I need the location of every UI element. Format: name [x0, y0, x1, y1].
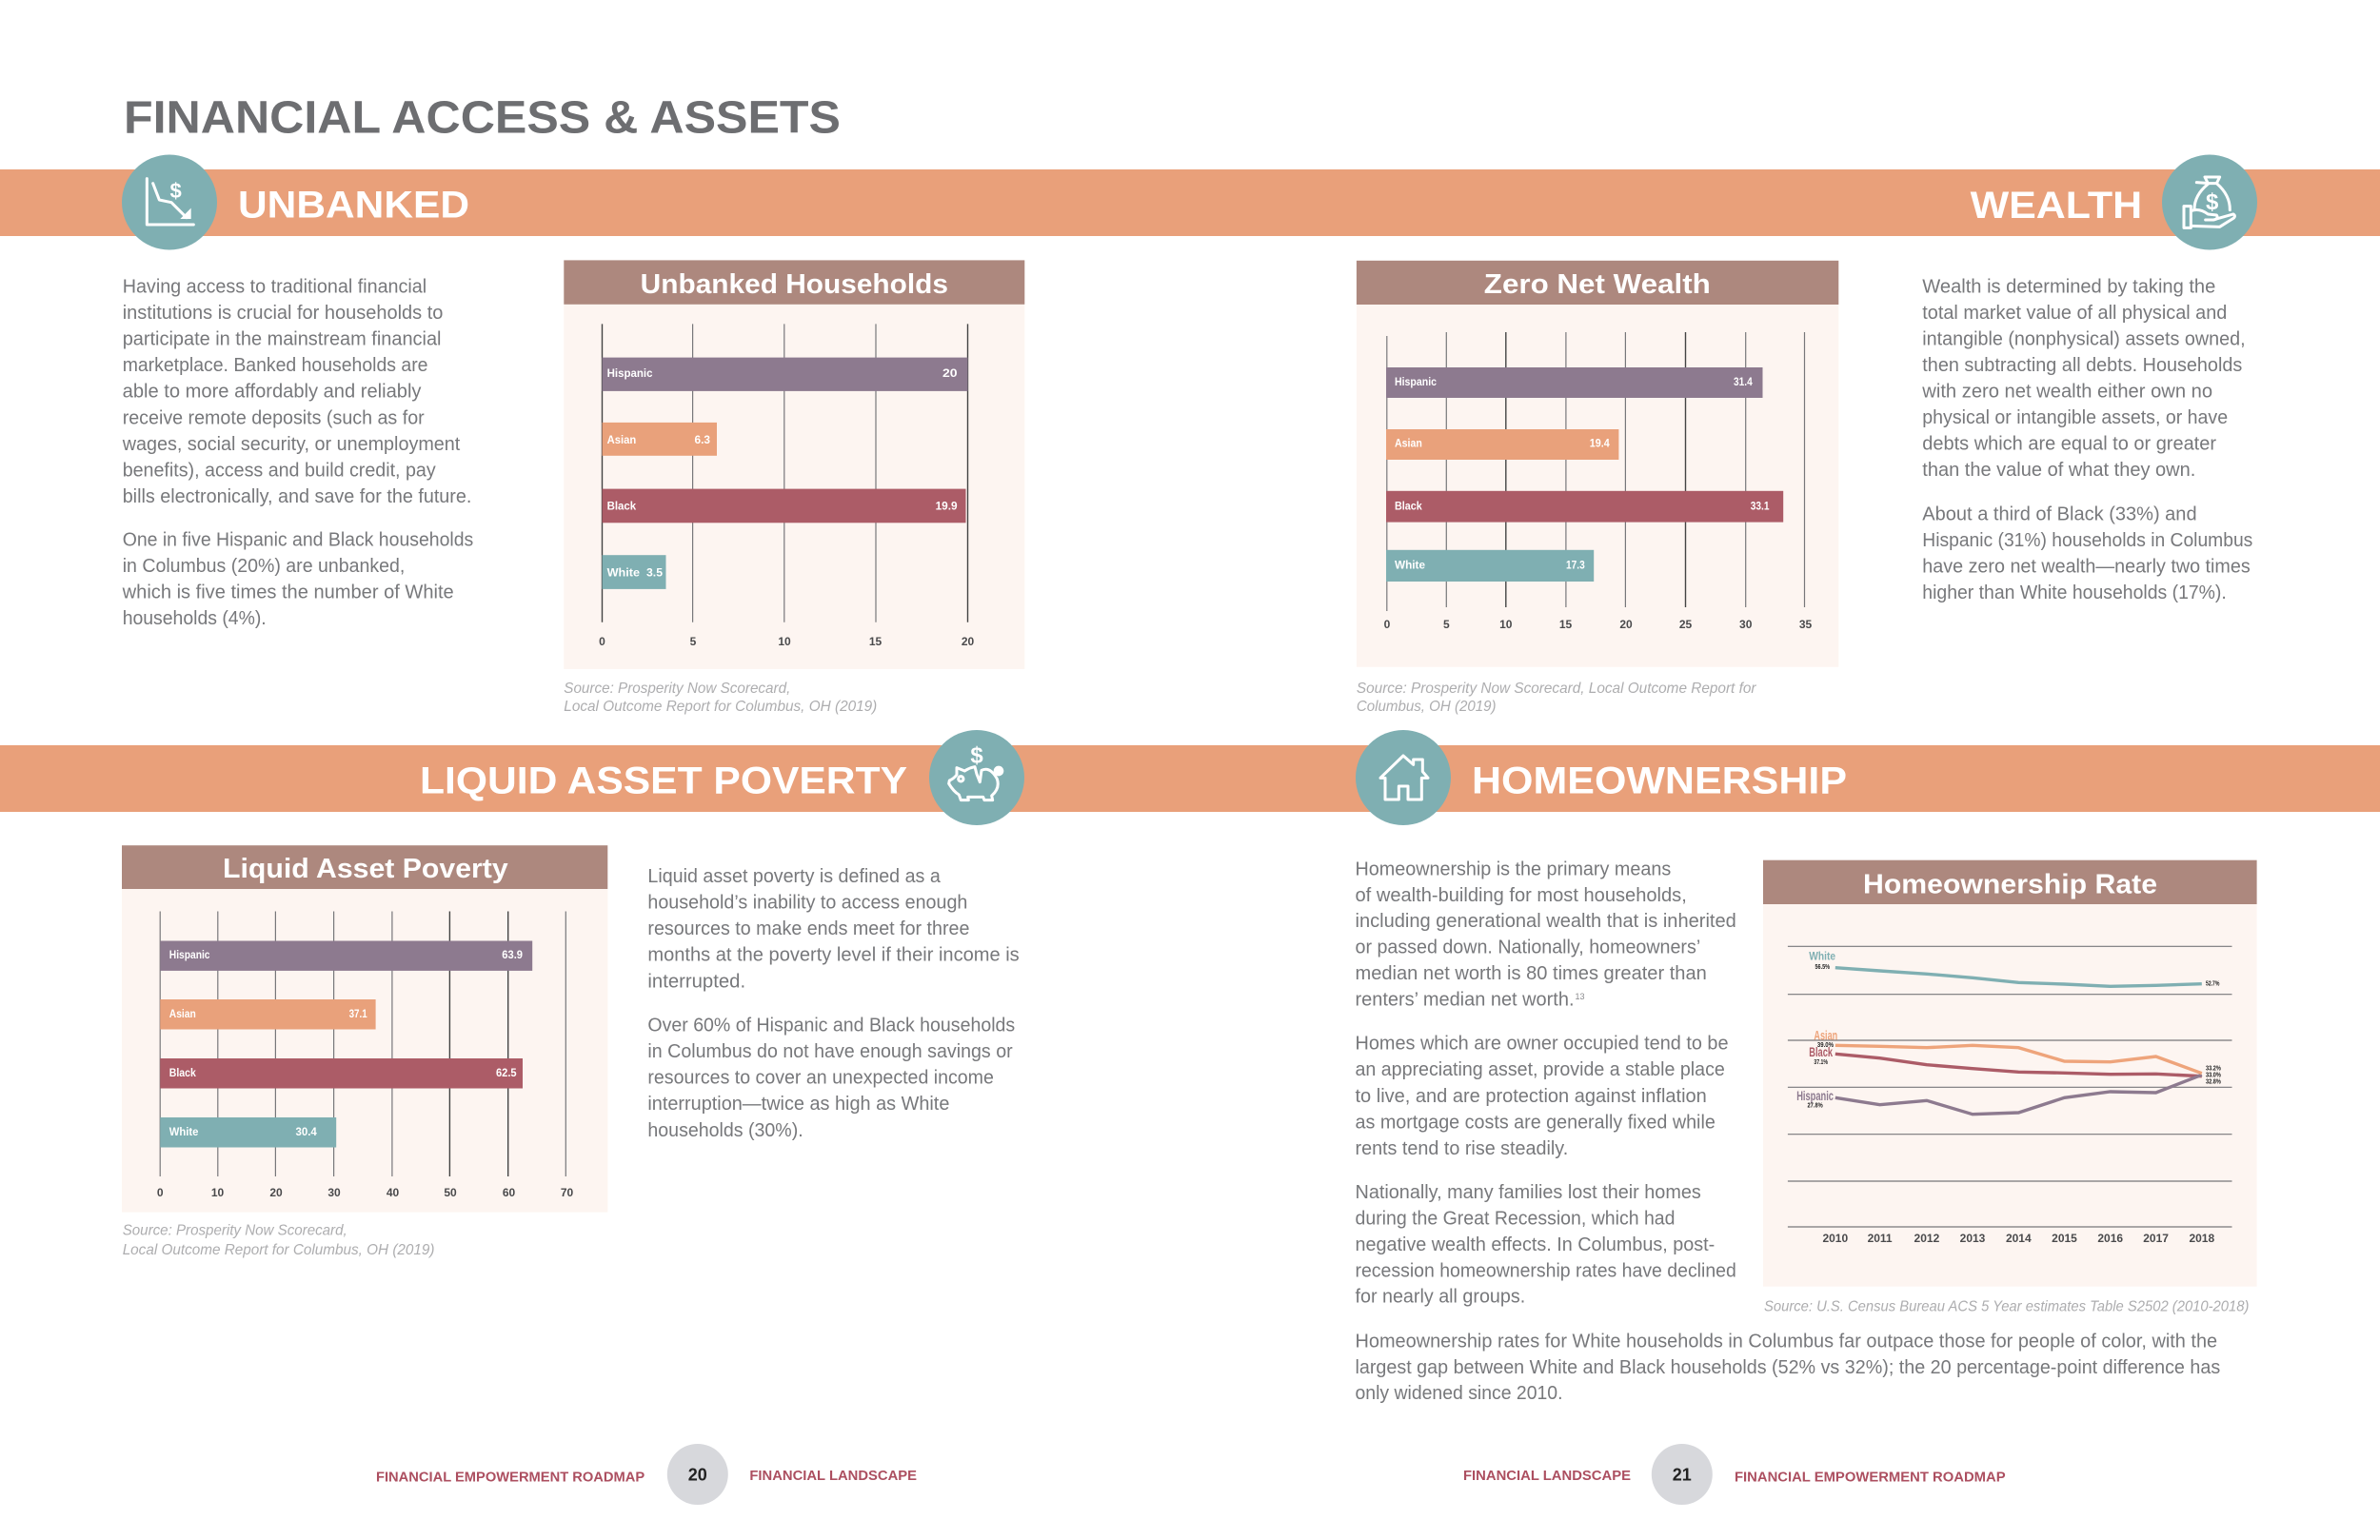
x axis labels: 2017	[2143, 1232, 2169, 1245]
text block: unbanked: One in five Hispanic and Black households	[123, 529, 473, 550]
bar: Asian: 19.4	[1590, 436, 1610, 449]
text block: unbanked: Having access to traditional financial	[123, 276, 426, 297]
bar: Hispanic	[160, 940, 532, 971]
text block: wealth: total market value of all physical and	[1922, 303, 2227, 324]
bar: White	[160, 1117, 336, 1148]
heading: liquid asset poverty: LIQUID ASSET POVERTY	[420, 760, 907, 801]
text block: wealth: debts which are equal to or greater	[1922, 433, 2216, 454]
line: Black: 37.1%	[1814, 1059, 1829, 1066]
text block: unbanked: wages, social security, or unemployment	[122, 434, 461, 455]
panel: unbanked	[122, 154, 1024, 715]
title: FINANCIAL ACCESS & ASSETS	[124, 93, 841, 143]
footer: page 21	[1463, 1444, 2006, 1505]
x axis labels: 2013	[1960, 1232, 1986, 1245]
chart heading: Liquid Asset Poverty	[223, 854, 508, 884]
bar: Black: 62.5	[496, 1066, 517, 1079]
panel: homeownership	[1356, 730, 2257, 1404]
bar: White: White	[1395, 559, 1425, 572]
panel: liquid asset poverty	[122, 730, 1024, 1258]
chart heading: Homeownership Rate	[1863, 869, 2157, 899]
icon: falling chart with dollar: $	[170, 179, 182, 203]
text block: liquid asset poverty: Liquid asset poverty is defined as a	[647, 866, 942, 887]
icon: money bag in hand: $	[2206, 189, 2218, 215]
footer: page 20	[376, 1444, 917, 1505]
source note: Local Outcome Report for Columbus, OH (2019)	[564, 699, 877, 715]
x axis labels	[1384, 618, 1812, 631]
text block: liquid asset poverty: months at the poverty level if their income is	[647, 945, 1020, 966]
bar: White	[1386, 550, 1594, 582]
text block: homeownership: recession homeownership rates have declined	[1356, 1260, 1736, 1281]
text block: unbanked	[122, 276, 473, 629]
text block: homeownership: or passed down. Nationally, homeowners’	[1356, 938, 1700, 958]
bar chart: liquid asset poverty	[122, 845, 607, 1213]
text block: liquid asset poverty: Over 60% of Hispanic and Black households	[647, 1015, 1015, 1036]
text block: wealth: Hispanic (31%) households in Columbus	[1922, 530, 2252, 551]
text block: homeownership: Homeownership rates for White households in Columbus far outpace those for people of color, with the	[1356, 1331, 2217, 1352]
top orange banner	[0, 169, 2380, 236]
text block: wealth: physical or intangible assets, or have	[1922, 407, 2228, 428]
bar: Asian: Asian	[169, 1007, 196, 1020]
x axis labels: 50	[444, 1186, 457, 1199]
text block: homeownership: Homeownership is the primary means	[1356, 859, 1671, 879]
bar: White	[602, 555, 666, 589]
text block: wealth	[1921, 276, 2252, 603]
source note: Columbus, OH (2019)	[1357, 699, 1497, 715]
bar: Hispanic: 20	[942, 366, 958, 380]
bar: Hispanic	[602, 358, 967, 391]
footer: page 21: FINANCIAL EMPOWERMENT ROADMAP	[1735, 1471, 2006, 1486]
text block: homeownership: median net worth is 80 times greater than	[1356, 963, 1707, 984]
text block: unbanked: in Columbus (20%) are unbanked,	[123, 556, 405, 577]
text block: liquid asset poverty: resources to make ends meet for three	[647, 918, 969, 939]
x axis labels: 35	[1799, 618, 1812, 631]
second orange banner	[0, 745, 2380, 812]
x axis labels: 25	[1679, 618, 1692, 631]
text block: unbanked: marketplace. Banked households are	[123, 355, 427, 376]
text block: homeownership: as mortgage costs are generally fixed while	[1356, 1112, 1716, 1133]
icon: house	[1356, 730, 1451, 825]
text block: homeownership: including generational wealth that is inherited	[1356, 911, 1736, 932]
text block: unbanked: institutions is crucial for households to	[123, 303, 443, 324]
icon: piggy bank: $	[970, 742, 983, 768]
footer: page 20: FINANCIAL LANDSCAPE	[749, 1469, 917, 1484]
bar: Black: Black	[1395, 499, 1422, 512]
text block: wealth: intangible (nonphysical) assets owned,	[1922, 328, 2246, 349]
text block: homeownership: renters’ median net worth.	[1356, 989, 1575, 1010]
end values: 33.2%	[2206, 1066, 2221, 1073]
text block: liquid asset poverty: interruption—twice as high as White	[647, 1094, 949, 1115]
x axis labels: 10	[211, 1186, 224, 1199]
x axis labels: 2016	[2097, 1232, 2123, 1245]
bar chart: unbanked households	[564, 260, 1024, 669]
bar: Asian: Asian	[1395, 436, 1422, 449]
bar: Black: 19.9	[936, 499, 958, 512]
bar: Asian: Asian	[607, 433, 636, 446]
bar: White: 30.4	[295, 1125, 317, 1138]
end values	[2206, 1066, 2221, 1086]
bar: Asian	[1386, 429, 1618, 460]
line: White: 52.7%	[2206, 980, 2220, 987]
heading: unbanked: UNBANKED	[238, 185, 469, 227]
text block: liquid asset poverty: interrupted.	[647, 971, 745, 992]
footer: page 20: FINANCIAL EMPOWERMENT ROADMAP	[376, 1471, 645, 1486]
text block: unbanked: bills electronically, and save for the future.	[123, 486, 471, 507]
bar: Hispanic: 31.4	[1734, 375, 1753, 388]
text block: wealth: than the value of what they own.	[1922, 460, 2195, 481]
text block: homeownership: of wealth-building for most households,	[1356, 885, 1687, 906]
text block: homeownership: to live, and are protection against inflation	[1356, 1086, 1707, 1107]
line: Asian: 39.0%	[1817, 1042, 1835, 1049]
bar: Hispanic: 63.9	[502, 948, 523, 961]
source note	[564, 681, 877, 715]
icon: piggy bank	[929, 730, 1024, 825]
x axis labels: 2015	[2052, 1232, 2077, 1245]
x axis labels: 2014	[2006, 1232, 2032, 1245]
text block: wealth: have zero net wealth—nearly two times	[1922, 557, 2251, 578]
icon: money bag in hand	[2162, 154, 2257, 249]
text block: wealth: with zero net wealth either own no	[1921, 381, 2212, 402]
source note: Source: U.S. Census Bureau ACS 5 Year estimates Table S2502 (2010-2018)	[1764, 1298, 2249, 1314]
text block: homeownership: only widened since 2010.	[1356, 1383, 1563, 1404]
text block: wealth: then subtracting all debts. Households	[1922, 355, 2242, 376]
text block: liquid asset poverty	[647, 866, 1020, 1141]
text block: homeownership: Nationally, many families lost their homes	[1356, 1182, 1701, 1203]
end values: 32.8%	[2206, 1079, 2221, 1086]
x axis labels: 2011	[1868, 1232, 1893, 1245]
chart heading: Zero Net Wealth	[1484, 269, 1711, 300]
text block: homeownership: an appreciating asset, provide a stable place	[1356, 1059, 1725, 1080]
bar: Hispanic: Hispanic	[1395, 375, 1437, 388]
x axis labels: 2010	[1822, 1232, 1848, 1245]
bar: Asian	[602, 423, 717, 456]
bar: Black	[602, 489, 965, 523]
line: Black	[1809, 1045, 2202, 1076]
heading: wealth: WEALTH	[1971, 185, 2142, 227]
source note: Source: Prosperity Now Scorecard,	[564, 681, 790, 697]
text block: homeownership: rents tend to rise steadily.	[1356, 1138, 1568, 1159]
x axis labels: 5	[690, 635, 697, 648]
bar: Hispanic: Hispanic	[169, 948, 210, 961]
line chart: homeownership rate	[1763, 860, 2257, 1287]
bar: Black	[1386, 491, 1783, 523]
footer: page 20: 20	[688, 1466, 707, 1485]
source note	[1357, 681, 1756, 715]
icon: falling chart with dollar	[122, 154, 217, 249]
text block: homeownership: 13	[1575, 992, 1585, 1001]
bar: Black: Black	[607, 499, 637, 512]
x axis labels: 60	[503, 1186, 515, 1199]
line: Hispanic: 27.8%	[1807, 1103, 1823, 1110]
text block: unbanked: benefits), access and build credit, pay	[123, 461, 436, 482]
x axis labels: 70	[561, 1186, 573, 1199]
x axis labels: 30	[1739, 618, 1753, 631]
text block: unbanked: which is five times the number of White	[122, 582, 454, 603]
x axis labels: 2018	[2189, 1232, 2214, 1245]
text block: liquid asset poverty: resources to cover an unexpected income	[647, 1068, 994, 1089]
bar: Black: 33.1	[1751, 499, 1770, 512]
line: Black: Black	[1809, 1045, 1833, 1059]
bar: White: 17.3	[1566, 559, 1585, 572]
bar: White: White	[607, 565, 640, 579]
text block: liquid asset poverty: household’s inability to access enough	[647, 893, 967, 914]
x axis labels: 10	[778, 635, 791, 648]
panel: wealth	[1357, 154, 2257, 715]
text block: homeownership: largest gap between White and Black households (52% vs 32%); the 20 percentage-point difference has	[1356, 1357, 2220, 1378]
end values: 33.0%	[2206, 1073, 2221, 1079]
x axis labels: 0	[599, 635, 605, 648]
text block: homeownership: Homes which are owner occupied tend to be	[1356, 1034, 1729, 1055]
text block: unbanked: households (4%).	[123, 608, 267, 629]
x axis labels: 15	[1559, 618, 1572, 631]
chart heading: Unbanked Households	[641, 269, 948, 300]
text block: wealth: Wealth is determined by taking the	[1922, 276, 2215, 297]
bar: Asian	[160, 999, 376, 1030]
x axis labels: 20	[269, 1186, 283, 1199]
line: White: 56.5%	[1815, 964, 1831, 971]
source note: Source: Prosperity Now Scorecard,	[123, 1223, 347, 1239]
bar: Asian: 6.3	[695, 433, 710, 446]
text block: liquid asset poverty: households (30%).	[647, 1120, 803, 1141]
line: Asian	[1814, 1029, 2202, 1074]
x axis labels: 20	[1619, 618, 1633, 631]
text block: homeownership: during the Great Recession, which had	[1356, 1209, 1676, 1230]
x axis labels: 2012	[1914, 1232, 1940, 1245]
bar: Black	[160, 1058, 523, 1089]
x axis labels	[599, 635, 974, 648]
text block: wealth: About a third of Black (33%) and	[1922, 504, 2197, 525]
text block: wealth: higher than White households (17%).	[1922, 582, 2227, 603]
text block: unbanked: able to more affordably and reliably	[123, 382, 421, 403]
x axis labels	[157, 1186, 573, 1199]
text block: liquid asset poverty: in Columbus do not have enough savings or	[647, 1041, 1013, 1062]
line: Asian: Asian	[1814, 1029, 1837, 1043]
x axis labels: 10	[1499, 618, 1513, 631]
footer: page 21: 21	[1673, 1466, 1692, 1485]
x axis labels: 0	[157, 1186, 164, 1199]
x axis labels	[1822, 1232, 2214, 1245]
footer: page 21: FINANCIAL LANDSCAPE	[1463, 1469, 1631, 1484]
source note: Source: Prosperity Now Scorecard, Local Outcome Report for	[1357, 681, 1756, 697]
bar: Black: Black	[169, 1066, 196, 1079]
text block: homeownership: negative wealth effects. In Columbus, post-	[1356, 1234, 1715, 1255]
bar: White: White	[169, 1125, 199, 1138]
text block: unbanked: receive remote deposits (such as for	[123, 407, 425, 428]
text block: homeownership	[1356, 859, 2220, 1404]
x axis labels: 5	[1443, 618, 1450, 631]
bar: Hispanic: Hispanic	[607, 366, 653, 380]
x axis labels: 20	[962, 635, 974, 648]
text block: unbanked: participate in the mainstream financial	[123, 329, 441, 350]
line: Hispanic: Hispanic	[1796, 1089, 1834, 1103]
bar: White: 3.5	[646, 565, 663, 579]
heading: homeownership: HOMEOWNERSHIP	[1472, 760, 1847, 802]
text block: homeownership: for nearly all groups.	[1356, 1287, 1525, 1308]
x axis labels: 0	[1384, 618, 1391, 631]
source note: Local Outcome Report for Columbus, OH (2019)	[123, 1242, 434, 1258]
x axis labels: 15	[869, 635, 882, 648]
bar chart: zero net wealth	[1357, 261, 1838, 667]
bar: Hispanic	[1386, 367, 1763, 398]
line: Hispanic	[1796, 1075, 2202, 1115]
source note	[123, 1223, 434, 1258]
x axis labels: 30	[327, 1186, 341, 1199]
bar: Asian: 37.1	[349, 1007, 367, 1020]
line: White: White	[1809, 950, 1835, 963]
line: White	[1809, 950, 2220, 987]
x axis labels: 40	[387, 1186, 399, 1199]
